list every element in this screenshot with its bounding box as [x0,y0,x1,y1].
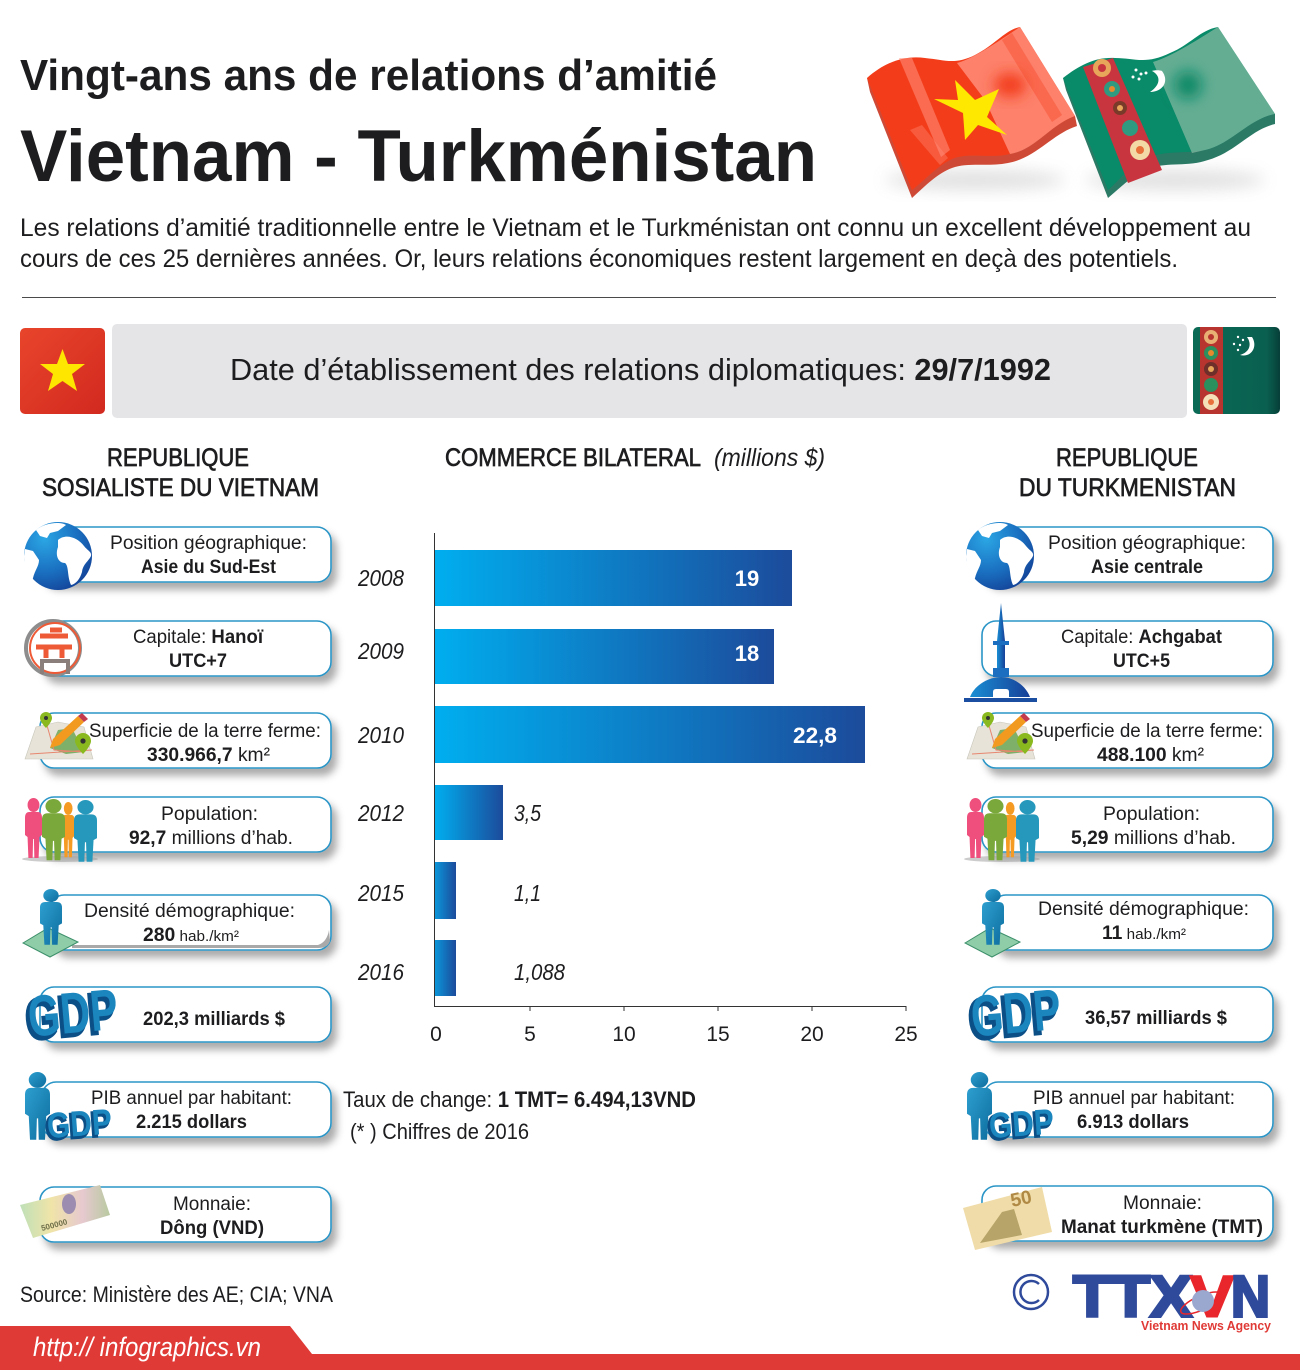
card: TM GDP per capita: 6.913 dollars [1077,1112,1189,1133]
card: VN GDP per capita [25,1072,331,1148]
card: VN population: 92,7 millions d’hab. [129,828,293,849]
logo: TTXVN: N [1231,1264,1270,1330]
card: VN GDP: 202,3 milliards $ [143,1009,285,1030]
logo: TTXVN [1014,1264,1271,1333]
card: VN GDP per capita: PIB annuel par habitant: [91,1088,292,1109]
card: VN area: Superficie de la terre ferme: [89,721,321,742]
card: TM position: Asie centrale [1091,557,1203,578]
card: TM population: 5,29 millions d’hab. [1071,828,1236,849]
intro text: cours de ces 25 dernières années. Or, leurs relations économiques restent largement en deçà des potentiels. [20,245,1178,273]
card: VN capital: UTC+7 [169,651,227,672]
title [20,51,817,197]
panel: Vietnam facts [20,522,331,1242]
year labels: 2008 [357,565,404,591]
card: TM GDP per capita: GDP [986,1103,1053,1148]
heading: Turkmenistan column [1019,444,1236,502]
card: VN density [23,889,331,957]
card: VN position [24,522,331,590]
card: VN currency: Monnaie: [173,1194,251,1215]
heading: Turkmenistan column: REPUBLIQUE [1056,444,1198,472]
value labels: 19 [735,566,759,591]
card: VN area [25,712,331,768]
title: Vingt-ans ans de relations d’amitié [20,51,717,100]
card: TM position: Position géographique: [1048,533,1246,554]
card: TM GDP: 36,57 milliards $ [1085,1008,1227,1029]
year labels: 2010 [357,722,404,748]
year labels: 2009 [357,638,404,664]
icon: Vietnam square flag [20,328,105,414]
card: VN GDP: GDP [25,977,121,1050]
card: TM capital: UTC+5 [1113,651,1170,672]
card: VN GDP per capita: GDP [44,1103,111,1148]
card: TM currency: Monnaie: [1123,1193,1202,1214]
value labels: 1,088 [514,959,565,985]
heading: Vietnam column: REPUBLIQUE [107,444,249,472]
bar chart: bilateral trade [357,533,918,1046]
axis tick labels: 10 [612,1023,636,1046]
intro text [20,214,1251,273]
card: VN capital: Capitale: Hanoï [133,627,264,648]
card: TM GDP per capita [967,1072,1273,1148]
panel: Turkmenistan facts [963,522,1273,1250]
note: exchange rate: (* ) Chiffres de 2016 [350,1119,529,1144]
source: Source: Ministère des AE; CIA; VNA [20,1282,333,1307]
flag: Vietnam wavy [867,27,1077,198]
heading: Vietnam column: SOSIALISTE DU VIETNAM [42,474,319,502]
card: VN GDP [22,977,331,1053]
card: TM area: 488.100 km² [1097,745,1204,766]
card: VN GDP per capita: GDP [46,1101,113,1146]
axis tick labels [430,1023,918,1046]
card: TM population: Population: [1103,804,1200,825]
intro text: Les relations d’amitié traditionnelle entre le Vietnam et le Turkménistan ont connu un excellent développement au [20,214,1251,242]
card: VN density: Densité démographique: [84,901,295,922]
value labels: 22,8 [793,723,837,748]
heading: bilateral trade: COMMERCE BILATERAL [445,444,701,472]
card: TM GDP [965,977,1273,1053]
icon: star of Vietnam flag [934,80,1007,140]
card: TM GDP: GDP [965,980,1061,1053]
card: VN GDP: GDP [22,980,118,1053]
axis tick labels: 5 [524,1023,536,1046]
axis tick labels: 20 [800,1023,824,1046]
banner: diplomatic relations date: Date d’établissement des relations diplomatiques: 29/7/1992 [230,352,1051,387]
flag: Turkmenistan wavy [1063,27,1275,198]
logo: TTXVN: V [1190,1264,1234,1330]
card: TM position [966,522,1273,590]
card: VN capital [26,621,331,676]
card: VN GDP per capita: 2.215 dollars [136,1112,247,1133]
title: Vietnam - Turkménistan [20,116,817,197]
card: TM density: Densité démographique: [1038,899,1249,920]
value labels: 1,1 [514,880,541,906]
year labels [357,565,404,985]
value labels: 3,5 [514,800,541,826]
card: VN currency: Dông (VND) [160,1218,264,1239]
card: TM area [967,712,1273,768]
axis tick labels: 0 [430,1023,442,1046]
axis tick labels: 15 [706,1023,730,1046]
card: VN currency: 500000 [40,1217,69,1233]
year labels: 2016 [357,959,404,985]
card: TM population [964,797,1273,862]
card: TM capital [964,603,1273,702]
value labels: 18 [735,641,759,666]
card: TM currency [963,1186,1273,1250]
value labels [514,566,837,985]
note: exchange rate: Taux de change: 1 TMT= 6.494,13VND [343,1087,696,1112]
card: TM GDP: GDP [968,977,1064,1050]
card: TM area: Superficie de la terre ferme: [1031,721,1263,742]
card: TM currency: Manat turkmène (TMT) [1061,1217,1263,1238]
icon: copyright [1014,1275,1048,1309]
heading: Vietnam column [42,444,319,502]
footer band [0,1326,1300,1370]
logo: TTXVN: TTX [1073,1264,1192,1330]
card: TM currency: 50 [1009,1187,1034,1212]
year labels: 2012 [357,800,404,826]
banner: diplomatic relations date [112,324,1187,418]
logo: TTXVN: Vietnam News Agency [1141,1319,1271,1333]
card: VN density: 280 hab./km² [143,925,239,946]
card: VN population: Population: [161,804,258,825]
card: VN area: 330.966,7 km² [147,745,270,766]
axis tick labels: 25 [894,1023,918,1046]
card: VN position: Position géographique: [110,533,307,554]
icon: crescent and stars [1132,68,1165,92]
icon: Turkmenistan square flag [1193,327,1280,414]
heading: bilateral trade: (millions $) [714,444,825,472]
card: TM capital: Capitale: Achgabat [1061,627,1223,648]
bars [435,550,865,996]
card: TM GDP per capita: GDP [988,1101,1055,1146]
footer url: http:// infographics.vn [33,1332,261,1362]
card: VN position: Asie du Sud-Est [141,557,277,578]
card: TM density [965,889,1273,957]
chart axes [434,533,906,1011]
card: VN currency [20,1185,331,1242]
note: exchange rate [343,1087,696,1144]
card: TM GDP per capita: PIB annuel par habitant: [1033,1088,1235,1109]
card: TM density: 11 hab./km² [1102,923,1186,944]
heading: Turkmenistan column: DU TURKMENISTAN [1019,474,1236,502]
card: VN population [22,797,331,862]
year labels: 2015 [357,880,404,906]
